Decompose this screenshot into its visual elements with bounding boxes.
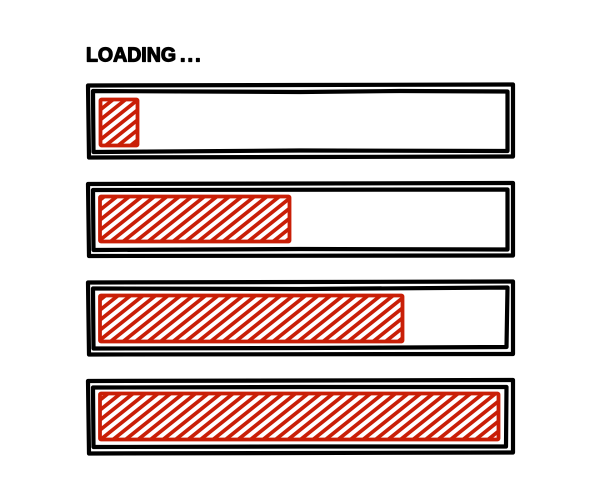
bar 4 inner frame — [93, 387, 506, 447]
bar 4 outer frame — [88, 380, 513, 454]
progress bar 4 — [88, 380, 513, 454]
bar 3 red hatched fill — [100, 296, 402, 342]
bar 1 inner frame — [93, 91, 508, 152]
bar 3 inner frame — [93, 288, 508, 348]
bar 2 inner frame — [93, 190, 508, 250]
bar 1 red hatched fill — [100, 100, 138, 146]
title: ... — [180, 44, 203, 66]
bar 2 red hatched fill — [100, 196, 290, 242]
progress bar 1 — [88, 84, 513, 158]
title: LOADING — [86, 44, 176, 66]
bar 4 red hatched fill — [100, 394, 498, 440]
progress bar 2 — [88, 183, 513, 256]
progress bar 3 — [88, 282, 513, 354]
bar 3 outer frame — [88, 282, 513, 354]
bar 1 outer frame — [88, 84, 513, 158]
bar 2 outer frame — [88, 183, 513, 256]
